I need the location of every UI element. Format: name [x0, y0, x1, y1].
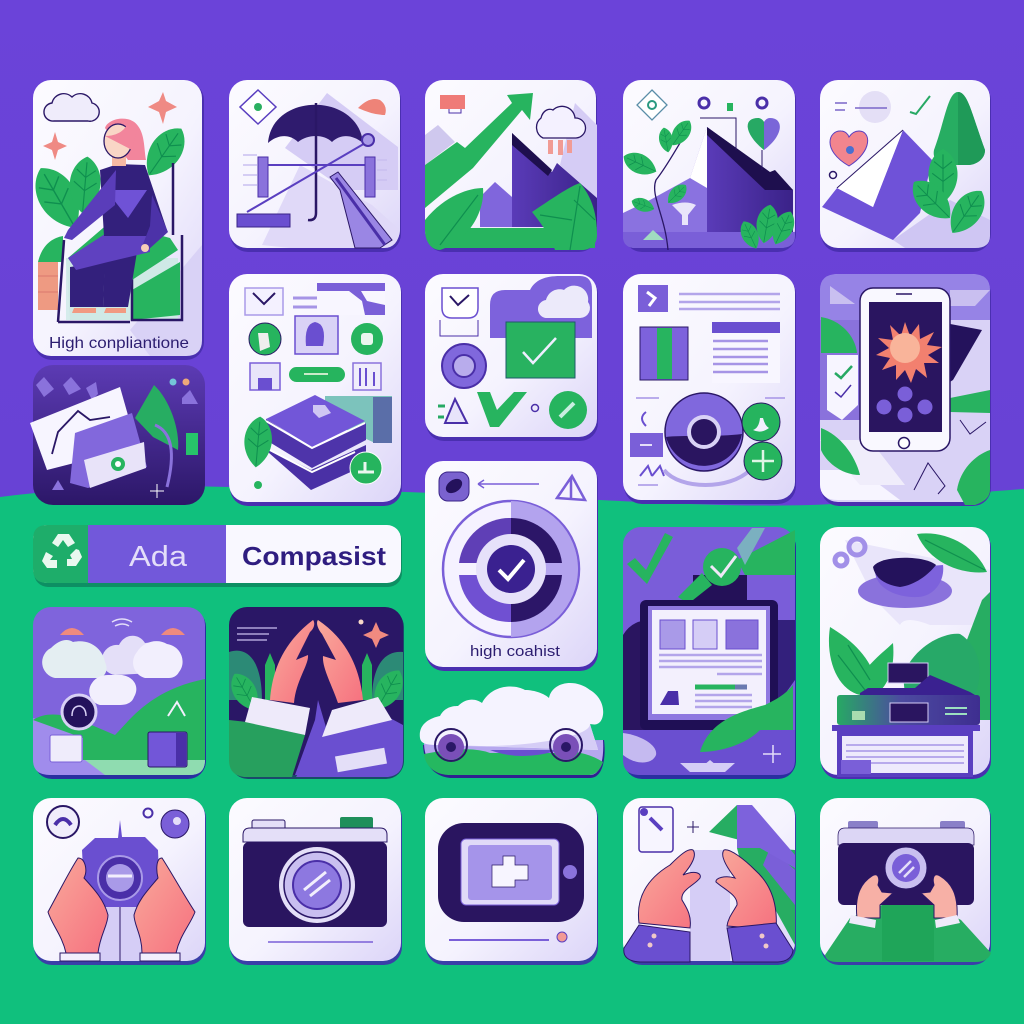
icon: cloud outline: [44, 94, 99, 121]
teal backdrop: [325, 396, 392, 443]
icon: corner circle right: [161, 810, 189, 838]
icon: right sleeve: [727, 923, 793, 962]
base line: [268, 941, 373, 943]
icon: triangle: [445, 399, 467, 423]
teal hills: [229, 651, 403, 700]
icon: left wheel: [435, 729, 467, 761]
card: cloud car: [420, 683, 605, 778]
purple cloud band: [490, 276, 592, 338]
icon: picture: [250, 363, 280, 390]
icon: folded mountain: [822, 130, 932, 240]
card: dark chart scene: [30, 365, 205, 505]
icon: check shield: [827, 355, 858, 420]
icon: heart: [748, 118, 764, 150]
leaf: [700, 685, 793, 752]
icon: phone buttons: [876, 386, 932, 422]
grey blob: [859, 91, 891, 123]
backdrop triangles: [425, 125, 455, 165]
sparkle: [150, 484, 164, 498]
label: Compasist: Compasist: [242, 541, 386, 571]
icon: chevron box: [442, 288, 478, 318]
icon: green stripe: [678, 573, 712, 604]
icon: right sleeve: [296, 718, 403, 777]
icon: play square: [638, 285, 668, 312]
icon: window: [317, 283, 385, 315]
icon: document: [70, 413, 147, 488]
light blob: [623, 733, 656, 762]
card: dark hands scene: [225, 607, 410, 779]
icon: right hand: [134, 858, 195, 953]
icon: tool card: [639, 807, 673, 852]
icon: white cloud: [538, 286, 590, 318]
green hill: [33, 679, 205, 760]
icon: sparkles: [43, 92, 177, 160]
icon: disc: [665, 393, 743, 471]
icon: pink flag: [440, 95, 465, 109]
text lines: [237, 628, 277, 640]
card: phone with sun: [820, 274, 991, 506]
top line marks: [835, 103, 887, 110]
lens: [885, 847, 927, 889]
mountain: [623, 127, 793, 248]
icon: left sleeve: [624, 925, 690, 962]
icon: saucer: [858, 574, 952, 608]
icon: small lens: [439, 472, 469, 501]
green ground: [435, 228, 595, 248]
green shirt: [825, 905, 991, 962]
icon: left hand: [270, 620, 314, 703]
icon: check mark: [499, 560, 524, 579]
icon: camera: [82, 820, 160, 907]
background: green hill: [0, 486, 1024, 1024]
leaves: [425, 188, 483, 250]
icon: green pill: [289, 367, 345, 382]
button: [563, 865, 577, 879]
icon: sun on screen: [876, 322, 942, 383]
icon: barbell: [247, 142, 370, 212]
icon: right hand: [317, 620, 363, 703]
card: hands on camera: [820, 798, 991, 965]
icon: laptop: [888, 663, 928, 683]
swoosh: [664, 470, 750, 485]
icon: round green left: [249, 323, 281, 355]
icon: minus block: [630, 433, 663, 457]
icon: contrast dial: [443, 501, 579, 637]
card: printer with leaves: [820, 527, 991, 779]
icon: heart: [830, 131, 868, 166]
card: mountain with growth arrow: [425, 80, 597, 252]
banner: recycle, Ada, Compasist: [33, 525, 402, 587]
icon: large green check: [477, 392, 527, 427]
icon: tablet: [640, 600, 778, 730]
leaves left: [821, 317, 857, 353]
icon: cup: [875, 565, 943, 597]
card: high contrast dial: [425, 461, 598, 671]
camera top: [848, 821, 878, 831]
label: Ada: Ada: [129, 541, 188, 573]
icon: bars: [353, 363, 381, 390]
icon: recycle: [42, 534, 82, 568]
icon: chevron box: [245, 288, 283, 315]
leaves left: [829, 627, 880, 695]
green hills right: [965, 592, 990, 720]
sparkle: [363, 622, 389, 648]
icon: pen: [330, 172, 392, 248]
card: device with plus: [425, 798, 598, 965]
icon: head portrait: [295, 316, 338, 354]
card: hands holding camera lens: [33, 798, 206, 965]
leaves: [225, 664, 410, 716]
card: mountain with plant: [620, 80, 799, 252]
small ring: [532, 404, 538, 412]
caption: high coahist: [470, 643, 561, 660]
dark panel: [623, 575, 790, 730]
icon: right wheel: [550, 729, 582, 761]
icon: green check: [627, 533, 673, 584]
center light panel: [98, 905, 146, 961]
icon: square: [148, 732, 187, 767]
icon: chair: [66, 258, 178, 320]
lavender foot: [893, 200, 990, 248]
leaf top right: [917, 533, 987, 573]
leaf right bottom: [957, 450, 990, 505]
icon: purple flap: [737, 805, 795, 868]
icon: round check: [703, 548, 741, 586]
icon: green arrow: [425, 93, 533, 208]
icon: cloud and rain: [537, 106, 586, 138]
icon: umbrella: [268, 105, 363, 143]
icon: triangle: [557, 476, 585, 500]
icon: chart sheet: [30, 387, 137, 470]
base mark: [680, 760, 735, 772]
small triangles: [36, 377, 198, 490]
icon: green top band: [737, 530, 795, 575]
plant: [655, 127, 690, 250]
icon: round green right: [351, 323, 383, 355]
icon: printer body: [837, 695, 980, 725]
icon: corner circle left: [47, 806, 79, 838]
lens: [279, 847, 355, 923]
green block and stack: [38, 236, 63, 262]
card: person seated in chair: [25, 80, 204, 360]
card: camera: [229, 798, 402, 965]
icon: left hand: [856, 875, 893, 918]
mountain: [480, 182, 512, 227]
outline marks: [914, 463, 945, 494]
icon: leaf circle: [742, 403, 780, 441]
icon: stacked box: [260, 445, 366, 490]
icon: small tree shape: [672, 202, 696, 225]
icon: left hand: [48, 858, 108, 953]
icon: plus circle: [744, 442, 782, 480]
arrow line: [478, 480, 539, 488]
icon: green tree: [135, 385, 178, 450]
icon: device frame: [438, 823, 584, 922]
figure: person: [70, 262, 105, 307]
icon: right hand: [716, 850, 776, 930]
icon: smartphone: [860, 288, 950, 451]
icon: pink blob: [358, 99, 386, 115]
icon: green tree: [934, 92, 985, 165]
icon: green circle: [549, 391, 587, 429]
text lines: [679, 294, 780, 309]
card: heart, triangle and tree: [820, 80, 993, 252]
caption: High conpliantione: [49, 335, 189, 352]
icon: green sheet: [709, 805, 795, 930]
card: clouds landscape: [33, 607, 206, 779]
icon: striped panel: [640, 327, 688, 380]
icon: left sleeve: [229, 720, 305, 777]
cuffs: [849, 915, 960, 928]
icon: keyboard: [837, 731, 973, 777]
card: hands with green sheet: [623, 798, 796, 965]
icon: gears: [835, 539, 865, 566]
icon: lens: [62, 695, 96, 729]
icon: text window: [712, 322, 780, 383]
card: cloud and check: [425, 274, 598, 441]
icon: round green badge: [350, 452, 382, 484]
camera body: [838, 843, 974, 905]
card: icons grid with box: [229, 274, 402, 506]
card: umbrella and barbell: [229, 80, 401, 252]
icon: right hand: [921, 875, 957, 918]
center shape: [295, 700, 340, 775]
leaf: [242, 415, 274, 469]
clouds: [42, 636, 183, 705]
camera top: [252, 820, 285, 830]
bottom band: [623, 730, 795, 775]
cuffs: [60, 953, 180, 961]
lower band: [33, 718, 205, 775]
card: tablet with green check: [623, 527, 796, 779]
icons: top symbols: [637, 90, 767, 120]
leaves behind person: [25, 120, 194, 237]
icon: small card: [50, 735, 82, 762]
icon: plus: [492, 856, 528, 887]
card: document and disc: [623, 274, 796, 504]
green strip: [950, 390, 990, 413]
icon: ring: [144, 808, 152, 818]
leaves: [904, 149, 993, 241]
icon: diamond: [240, 90, 276, 124]
icon: left hand: [638, 850, 700, 928]
icon: green check box: [506, 322, 575, 378]
camera body: [243, 842, 387, 927]
icon: purple dial: [442, 344, 486, 388]
slider: [449, 939, 549, 941]
